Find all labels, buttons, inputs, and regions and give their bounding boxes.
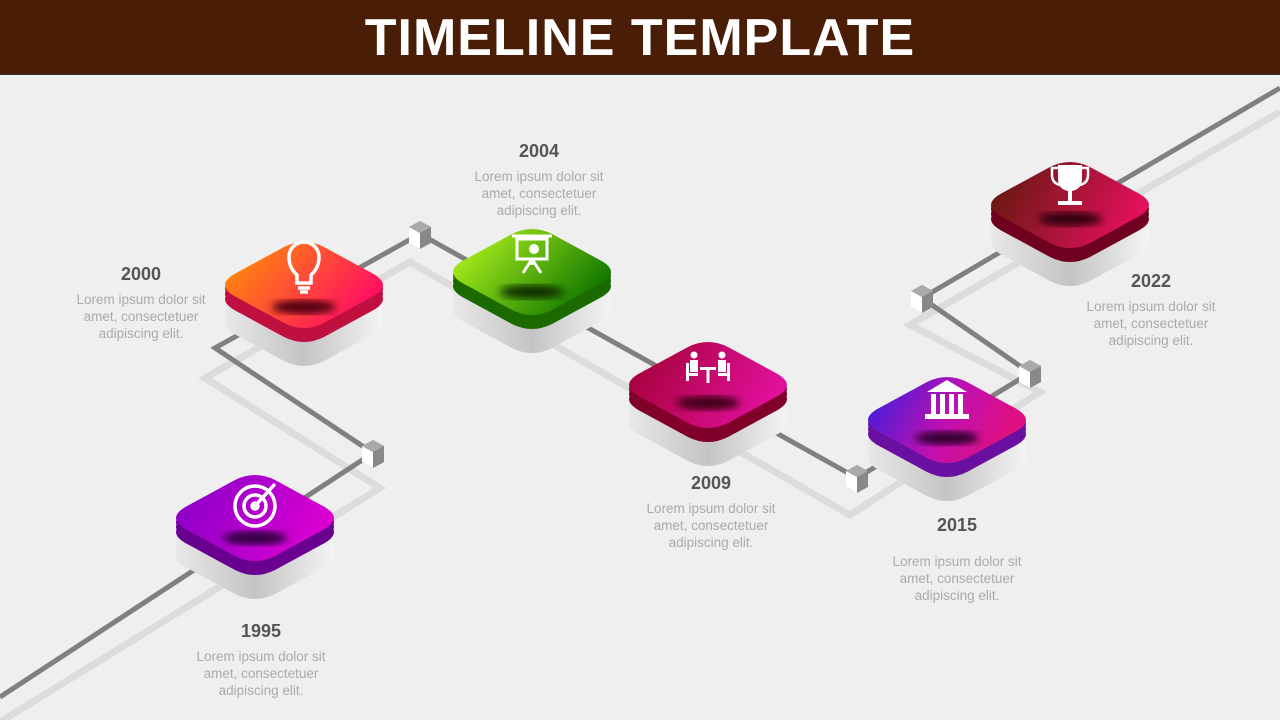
label 1995: amet, consectetuer	[204, 666, 318, 681]
label 1995	[196, 621, 326, 698]
label 2000: adipiscing elit.	[99, 326, 183, 341]
label 2015: 2015	[937, 515, 977, 535]
tile 2015	[868, 377, 1026, 501]
title: TIMELINE TEMPLATE	[365, 9, 915, 67]
icon: meeting	[686, 352, 730, 383]
icon: presentation	[512, 236, 552, 273]
icon: target	[235, 484, 275, 526]
label 2009: amet, consectetuer	[654, 518, 768, 533]
tile 1995	[176, 475, 334, 599]
label 2015: adipiscing elit.	[915, 588, 999, 603]
label 1995: Lorem ipsum dolor sit	[196, 649, 326, 664]
header bar	[0, 0, 1280, 75]
label 2004	[474, 141, 604, 218]
label 2015	[892, 515, 1022, 603]
label 2022: adipiscing elit.	[1109, 333, 1193, 348]
icon: bulb	[289, 242, 319, 292]
label 2022	[1086, 271, 1216, 348]
label 2009	[646, 473, 776, 550]
connectors	[362, 221, 1041, 493]
label 2022: 2022	[1131, 271, 1171, 291]
label 2004: 2004	[519, 141, 559, 161]
label 2022: Lorem ipsum dolor sit	[1086, 299, 1216, 314]
tile 2009	[629, 342, 787, 466]
label 1995: 1995	[241, 621, 281, 641]
tile 2004	[453, 229, 611, 353]
label 2000: amet, consectetuer	[84, 309, 198, 324]
label 2004: amet, consectetuer	[482, 186, 596, 201]
label 2004: Lorem ipsum dolor sit	[474, 169, 604, 184]
tile 2022	[991, 162, 1149, 286]
label 2000: Lorem ipsum dolor sit	[76, 292, 206, 307]
label 2015: Lorem ipsum dolor sit	[892, 554, 1022, 569]
label 2009: adipiscing elit.	[669, 535, 753, 550]
label 1995: adipiscing elit.	[219, 683, 303, 698]
label 2015: amet, consectetuer	[900, 571, 1014, 586]
label 2004: adipiscing elit.	[497, 203, 581, 218]
label 2009: Lorem ipsum dolor sit	[646, 501, 776, 516]
label 2000: 2000	[121, 264, 161, 284]
label 2000	[76, 264, 206, 341]
label 2009: 2009	[691, 473, 731, 493]
label 2022: amet, consectetuer	[1094, 316, 1208, 331]
tile 2000	[225, 242, 383, 366]
icon: trophy	[1052, 165, 1088, 205]
icon: bank	[925, 380, 969, 419]
